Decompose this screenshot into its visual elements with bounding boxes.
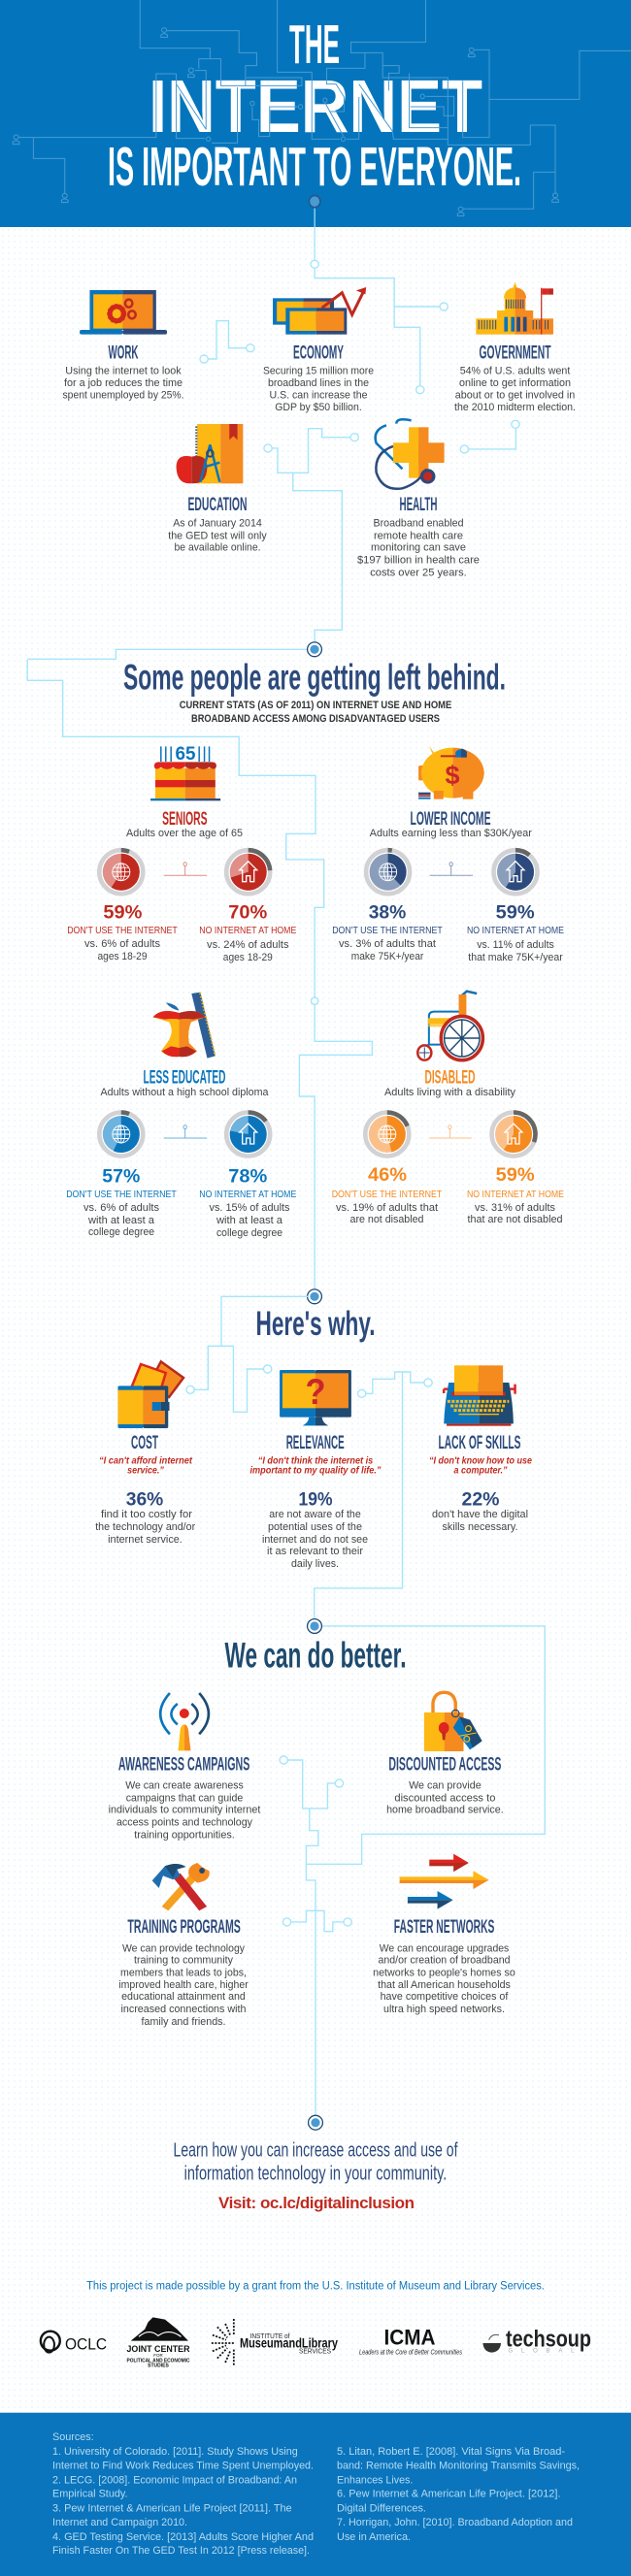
title: THE	[289, 14, 340, 76]
sources column one: Internet and Campaign 2010.	[52, 2517, 187, 2528]
text block: are not aware of the	[269, 1509, 361, 1520]
stat: 78%: vs. 15% of adults	[210, 1202, 290, 1214]
text block: We can provide	[409, 1779, 482, 1791]
panel: cost	[95, 1361, 196, 1546]
logo: institute of museum and library services: MuseumandLibrary	[240, 2334, 338, 2350]
panel: discounted access	[386, 1692, 504, 1815]
text block: training to community	[134, 1954, 233, 1966]
heading: here's why: Here's why.	[256, 1305, 375, 1343]
text block: that all American households	[378, 1979, 511, 1991]
sources column two: 6. Pew Internet & American Life Project. [2012].	[337, 2489, 561, 2500]
stat: 57%	[66, 1166, 177, 1238]
connector	[430, 863, 473, 875]
heading: LOWER INCOME	[410, 808, 491, 830]
node marker	[308, 642, 321, 657]
donut chart: don't use the internet 38%	[366, 850, 410, 894]
stat: 59%: that make 75K+/year	[468, 952, 563, 963]
donut chart: don't use the internet 57%	[99, 1112, 143, 1157]
subtitle: CURRENT STATS (AS OF 2011) ON INTERNET USE AND HOME	[180, 700, 451, 711]
footer panel: sources	[0, 2413, 631, 2576]
text block: Adults living with a disability	[384, 1087, 515, 1098]
heading: FASTER NETWORKS	[394, 1916, 494, 1938]
stat: 59%	[467, 902, 564, 963]
call to action	[173, 2138, 458, 2212]
text block: discounted access to	[394, 1792, 495, 1804]
subtitle: BROADBAND ACCESS AMONG DISADVANTAGED USERS	[191, 713, 440, 725]
stat: 57%: vs. 6% of adults	[83, 1202, 159, 1214]
text block: We can provide technology	[122, 1942, 245, 1954]
stat: 59%: vs. 11% of adults	[477, 939, 554, 951]
text block: have competitive choices of	[381, 1991, 509, 2003]
sources column two: Digital Differences.	[337, 2503, 426, 2515]
icon: money and chart	[273, 287, 366, 335]
text block	[95, 1509, 196, 1546]
circuit connector: section four	[280, 1649, 545, 2117]
text block: campaigns that can guide	[126, 1792, 243, 1804]
heading: EDUCATION	[188, 494, 247, 515]
panel: disabled	[332, 992, 564, 1225]
stat: 46%: 46%	[368, 1164, 407, 1186]
stat: 70%: NO INTERNET AT HOME	[199, 925, 296, 936]
heading: GOVERNMENT	[480, 342, 551, 363]
sources column one: 2. LECG. [2008]. Economic Impact of Broadband: An	[52, 2474, 297, 2486]
stat: 38%: DON'T USE THE INTERNET	[332, 925, 443, 936]
icon: typewriter	[444, 1365, 515, 1426]
quote: “I don't think the internet is	[258, 1456, 374, 1467]
stat: 70%: 70%	[228, 902, 267, 924]
stat: 57%: 57%	[102, 1166, 140, 1188]
stat: 22%: 22%	[462, 1489, 499, 1511]
panel: faster networks	[373, 1854, 515, 2015]
logo: techsoup: techsoup	[506, 2326, 591, 2352]
text block: the 2010 midterm election.	[454, 402, 576, 413]
text block: We can create awareness	[125, 1779, 244, 1791]
donut chart: no internet at home 70%	[226, 850, 270, 894]
panel: relevance	[250, 1370, 381, 1570]
sources column one: Empirical Study.	[52, 2489, 128, 2500]
title: INTERNET	[149, 65, 482, 148]
stat: 38%: make 75K+/year	[351, 951, 424, 962]
logo: joint center: STUDIES	[148, 2364, 169, 2369]
panel: education	[168, 424, 267, 553]
stat: 59%: 59%	[103, 902, 142, 924]
text block: the GED test will only	[168, 530, 267, 541]
connector	[164, 1125, 207, 1138]
stat: 59%: vs. 6% of adults	[84, 938, 160, 950]
sources column one: 4. GED Testing Service. [2013] Adults Score Higher And	[52, 2531, 314, 2543]
logo: OCLC: OCLC	[65, 2336, 107, 2354]
text block: improved health care, higher	[118, 1979, 249, 1991]
icon: laptop with gears	[80, 290, 167, 335]
text block: home broadband service.	[386, 1804, 504, 1815]
sources column two: 7. Horrigan, John. [2010]. Broadband Adoption and	[337, 2517, 573, 2528]
heading: LACK OF SKILLS	[439, 1432, 520, 1453]
text block: potential uses of the	[268, 1521, 362, 1533]
stat: 59%: NO INTERNET AT HOME	[467, 925, 564, 936]
stat: 36%: 36%	[126, 1489, 163, 1511]
heading: DISCOUNTED ACCESS	[388, 1754, 501, 1776]
stat: 57%: DON'T USE THE INTERNET	[66, 1189, 177, 1200]
text block: $197 billion in health care	[357, 554, 480, 566]
call to action: Learn how you can increase access and use of	[173, 2138, 458, 2161]
stat: 70%	[199, 902, 296, 963]
quote	[429, 1456, 532, 1477]
heading: WORK	[109, 342, 138, 363]
text block: the technology and/or	[95, 1521, 196, 1533]
logo: OCLC	[41, 2331, 107, 2354]
text block	[373, 1942, 515, 2015]
text block: As of January 2014	[173, 517, 262, 529]
sources column one: Internet to Find Work Reduces Time Spent Unemployed.	[52, 2460, 314, 2471]
logo strip	[41, 2317, 591, 2369]
text block: broadband lines in the	[268, 377, 369, 389]
text block: about or to get involved in	[455, 389, 575, 401]
stat: 19%: 19%	[299, 1489, 332, 1511]
call to action: information technology in your community.	[184, 2163, 447, 2185]
logo: techsoup: GLOBAL	[509, 2348, 575, 2354]
node marker	[308, 1289, 321, 1304]
quote: “I don't know how to use	[429, 1456, 532, 1467]
text block	[109, 1779, 260, 1841]
stat: 59%: 59%	[496, 1164, 535, 1186]
sources column two: Enhances Lives.	[337, 2474, 413, 2486]
text block	[454, 365, 576, 413]
header circuit lines	[13, 0, 631, 216]
heading: SENIORS	[162, 808, 208, 830]
text block: internet service.	[108, 1534, 183, 1546]
stat: 78%: NO INTERNET AT HOME	[199, 1189, 296, 1200]
icon: computer monitor	[280, 1370, 351, 1425]
logo: joint center: POLITICAL AND ECONOMIC	[126, 2359, 190, 2364]
logo: institute of museum and library services: SERVICES	[299, 2349, 331, 2356]
text block: educational attainment and	[121, 1991, 246, 2003]
stat: 38%	[332, 902, 443, 962]
logo: joint center: FOR	[153, 2353, 163, 2358]
logo: joint center	[126, 2317, 190, 2369]
logo: joint center: JOINT CENTER	[126, 2344, 190, 2355]
circuit connector: section two	[27, 660, 372, 1290]
text block	[386, 1779, 504, 1815]
stat: 78%: 78%	[228, 1166, 267, 1188]
quote: “I can't afford internet	[99, 1456, 193, 1467]
grant note: This project is made possible by a grant from the U.S. Institute of Museum and Library Services.	[86, 2280, 545, 2292]
text block: GDP by $50 billion.	[275, 402, 362, 413]
stat: 70%: vs. 24% of adults	[207, 939, 289, 951]
panel: training programs	[118, 1863, 249, 2028]
stat: 46%: vs. 19% of adults that	[336, 1202, 438, 1214]
text block	[263, 365, 374, 413]
stat: 38%: 38%	[369, 902, 406, 924]
panel: less educated	[66, 993, 296, 1239]
icon: wallet with money	[117, 1361, 183, 1428]
stat: 59%	[67, 902, 178, 962]
circuit connector: section three	[186, 1296, 545, 1649]
donut chart: don't use the internet 59%	[99, 850, 143, 894]
stat: 59%: DON'T USE THE INTERNET	[67, 925, 178, 936]
text block: 54% of U.S. adults went	[460, 365, 570, 376]
sources column one: 1. University of Colorado. [2011]. Study Shows Using	[52, 2446, 298, 2458]
text block	[168, 517, 267, 553]
icon: padlock with price tag	[424, 1692, 482, 1751]
connector	[429, 1125, 472, 1138]
stat: 70%: ages 18-29	[223, 952, 273, 963]
heading: LESS EDUCATED	[144, 1067, 225, 1089]
dollar sign: $	[445, 761, 460, 790]
donut chart: no internet at home 78%	[226, 1112, 270, 1157]
icon: apple core and ruler	[153, 993, 216, 1059]
panel: lower income	[332, 745, 564, 963]
connector	[164, 863, 207, 875]
logo: techsoup	[482, 2326, 591, 2354]
sources column two	[337, 2446, 580, 2543]
text block: networks to people's homes so	[373, 1967, 515, 1978]
stat: 57%: college degree	[88, 1226, 154, 1238]
sources column one: 3. Pew Internet & American Life Project [2011]. The	[52, 2503, 292, 2515]
text block: family and friends.	[142, 2016, 225, 2028]
text block: Broadband enabled	[373, 517, 464, 529]
heading: AWARENESS CAMPAIGNS	[118, 1754, 249, 1776]
text block: daily lives.	[291, 1558, 339, 1570]
text block	[262, 1509, 368, 1570]
heading: DISABLED	[425, 1067, 476, 1089]
stat: 59%	[467, 1164, 564, 1225]
panel: government	[454, 282, 576, 413]
text block: training opportunities.	[134, 1829, 235, 1841]
quote: a computer.”	[454, 1466, 507, 1477]
text block: Adults over the age of 65	[126, 828, 243, 839]
text block: for a job reduces the time	[64, 377, 183, 389]
stat: 59%: that are not disabled	[468, 1214, 563, 1225]
icon: hammer and wrench	[152, 1863, 210, 1910]
heading: HEALTH	[400, 494, 437, 515]
person icons	[13, 28, 558, 216]
text block: We can encourage upgrades	[380, 1942, 510, 1954]
stat: 78%: college degree	[216, 1227, 282, 1239]
text block: costs over 25 years.	[370, 567, 467, 578]
text block: spent unemployed by 25%.	[62, 389, 184, 401]
icon: birthday cake	[150, 746, 220, 800]
stat: 59%: 59%	[496, 902, 535, 924]
heading: ECONOMY	[293, 342, 344, 363]
logo: institute of museum and library services	[211, 2319, 338, 2366]
header node	[309, 195, 321, 227]
text block: find it too costly for	[101, 1509, 192, 1520]
link: Visit: oc.lc/digitalinclusion	[218, 2194, 415, 2212]
sources column one: Sources:	[52, 2431, 94, 2443]
stat: 46%	[332, 1164, 443, 1225]
panel: health	[357, 419, 480, 578]
text block	[62, 365, 184, 401]
stat: 59%: ages 18-29	[97, 951, 148, 962]
donut chart: no internet at home 59%	[491, 1112, 536, 1157]
quote	[250, 1456, 381, 1477]
text block	[118, 1942, 249, 2028]
icon: speed arrows	[400, 1854, 489, 1909]
sources column two: Use in America.	[337, 2531, 411, 2543]
logo: ICMA: ICMA	[384, 2326, 436, 2350]
node marker	[309, 2115, 322, 2130]
donut chart: no internet at home 59%	[493, 850, 538, 894]
panel: seniors	[67, 744, 296, 963]
panel: lack of skills	[429, 1365, 532, 1533]
icon: piggy bank	[418, 745, 484, 799]
stat: 59%: NO INTERNET AT HOME	[467, 1189, 564, 1200]
heading: RELEVANCE	[286, 1432, 345, 1453]
logo: ICMA	[359, 2326, 462, 2357]
panel: work	[62, 290, 184, 401]
text block: remote health care	[374, 530, 463, 541]
sources column two: band: Remote Health Monitoring Transmits Savings,	[337, 2460, 580, 2471]
text block: Securing 15 million more	[263, 365, 374, 376]
sources column one: Finish Faster On The GED Test In 2012 [Press release].	[52, 2545, 310, 2557]
stat: 78%	[199, 1166, 296, 1239]
stat: 78%: with at least a	[216, 1215, 283, 1226]
text block: monitoring can save	[371, 541, 466, 553]
text block: be available online.	[175, 541, 260, 553]
text block: increased connections with	[120, 2004, 247, 2015]
icon: book, apple and compass	[177, 424, 243, 483]
text block: individuals to community internet	[109, 1804, 260, 1815]
icon: question mark: ?	[305, 1372, 326, 1412]
title	[108, 14, 521, 198]
text block: don't have the digital	[432, 1509, 528, 1520]
text block: it as relevant to their	[267, 1546, 363, 1557]
text block	[357, 517, 480, 578]
text block: skills necessary.	[443, 1521, 518, 1533]
text block: Adults earning less than $30K/year	[370, 828, 532, 839]
icon: capitol building	[476, 282, 553, 335]
icon: wheelchair	[417, 992, 482, 1060]
stat: 46%: DON'T USE THE INTERNET	[332, 1189, 443, 1200]
logo: ICMA: Leaders at the Core of Better Communities	[359, 2350, 462, 2357]
quote	[99, 1456, 193, 1477]
logo: institute of museum and library services: INSTITUTE of	[250, 2331, 290, 2340]
text block: Adults without a high school diploma	[101, 1087, 269, 1098]
panel: economy	[263, 287, 374, 413]
sources column two: 5. Litan, Robert E. [2008]. Vital Signs Via Broad-	[337, 2446, 565, 2458]
donut chart: don't use the internet 46%	[365, 1112, 409, 1157]
stat: 59%: vs. 31% of adults	[475, 1202, 555, 1214]
text block: online to get information	[459, 377, 571, 389]
stat: 57%: with at least a	[87, 1215, 155, 1226]
heading: we can do better: We can do better.	[225, 1635, 406, 1675]
quote: service.”	[127, 1466, 164, 1477]
icon: medical cross and stethoscope	[376, 419, 445, 489]
heading: COST	[131, 1432, 158, 1453]
text block	[432, 1509, 528, 1533]
node marker	[308, 1619, 321, 1633]
quote: important to my quality of life.”	[250, 1466, 381, 1477]
text block: members that leads to jobs,	[120, 1967, 247, 1978]
panel: awareness campaigns	[109, 1693, 260, 1841]
text block: Using the internet to look	[65, 365, 182, 376]
stat: 38%: vs. 3% of adults that	[339, 938, 436, 950]
text block: access points and technology	[116, 1816, 252, 1828]
text block: and/or creation of broadband	[379, 1954, 511, 1966]
heading: TRAINING PROGRAMS	[127, 1916, 241, 1938]
text block: internet and do not see	[262, 1534, 368, 1546]
text block: U.S. can increase the	[270, 389, 367, 401]
sources column one	[52, 2431, 314, 2557]
subtitle	[180, 700, 451, 725]
text block: ultra high speed networks.	[383, 2004, 505, 2015]
header banner	[0, 0, 631, 227]
circuit connector: section one	[27, 227, 519, 659]
stat: 46%: are not disabled	[349, 1214, 423, 1225]
cake number: 65	[175, 744, 196, 765]
icon: broadcast antenna	[160, 1693, 209, 1750]
